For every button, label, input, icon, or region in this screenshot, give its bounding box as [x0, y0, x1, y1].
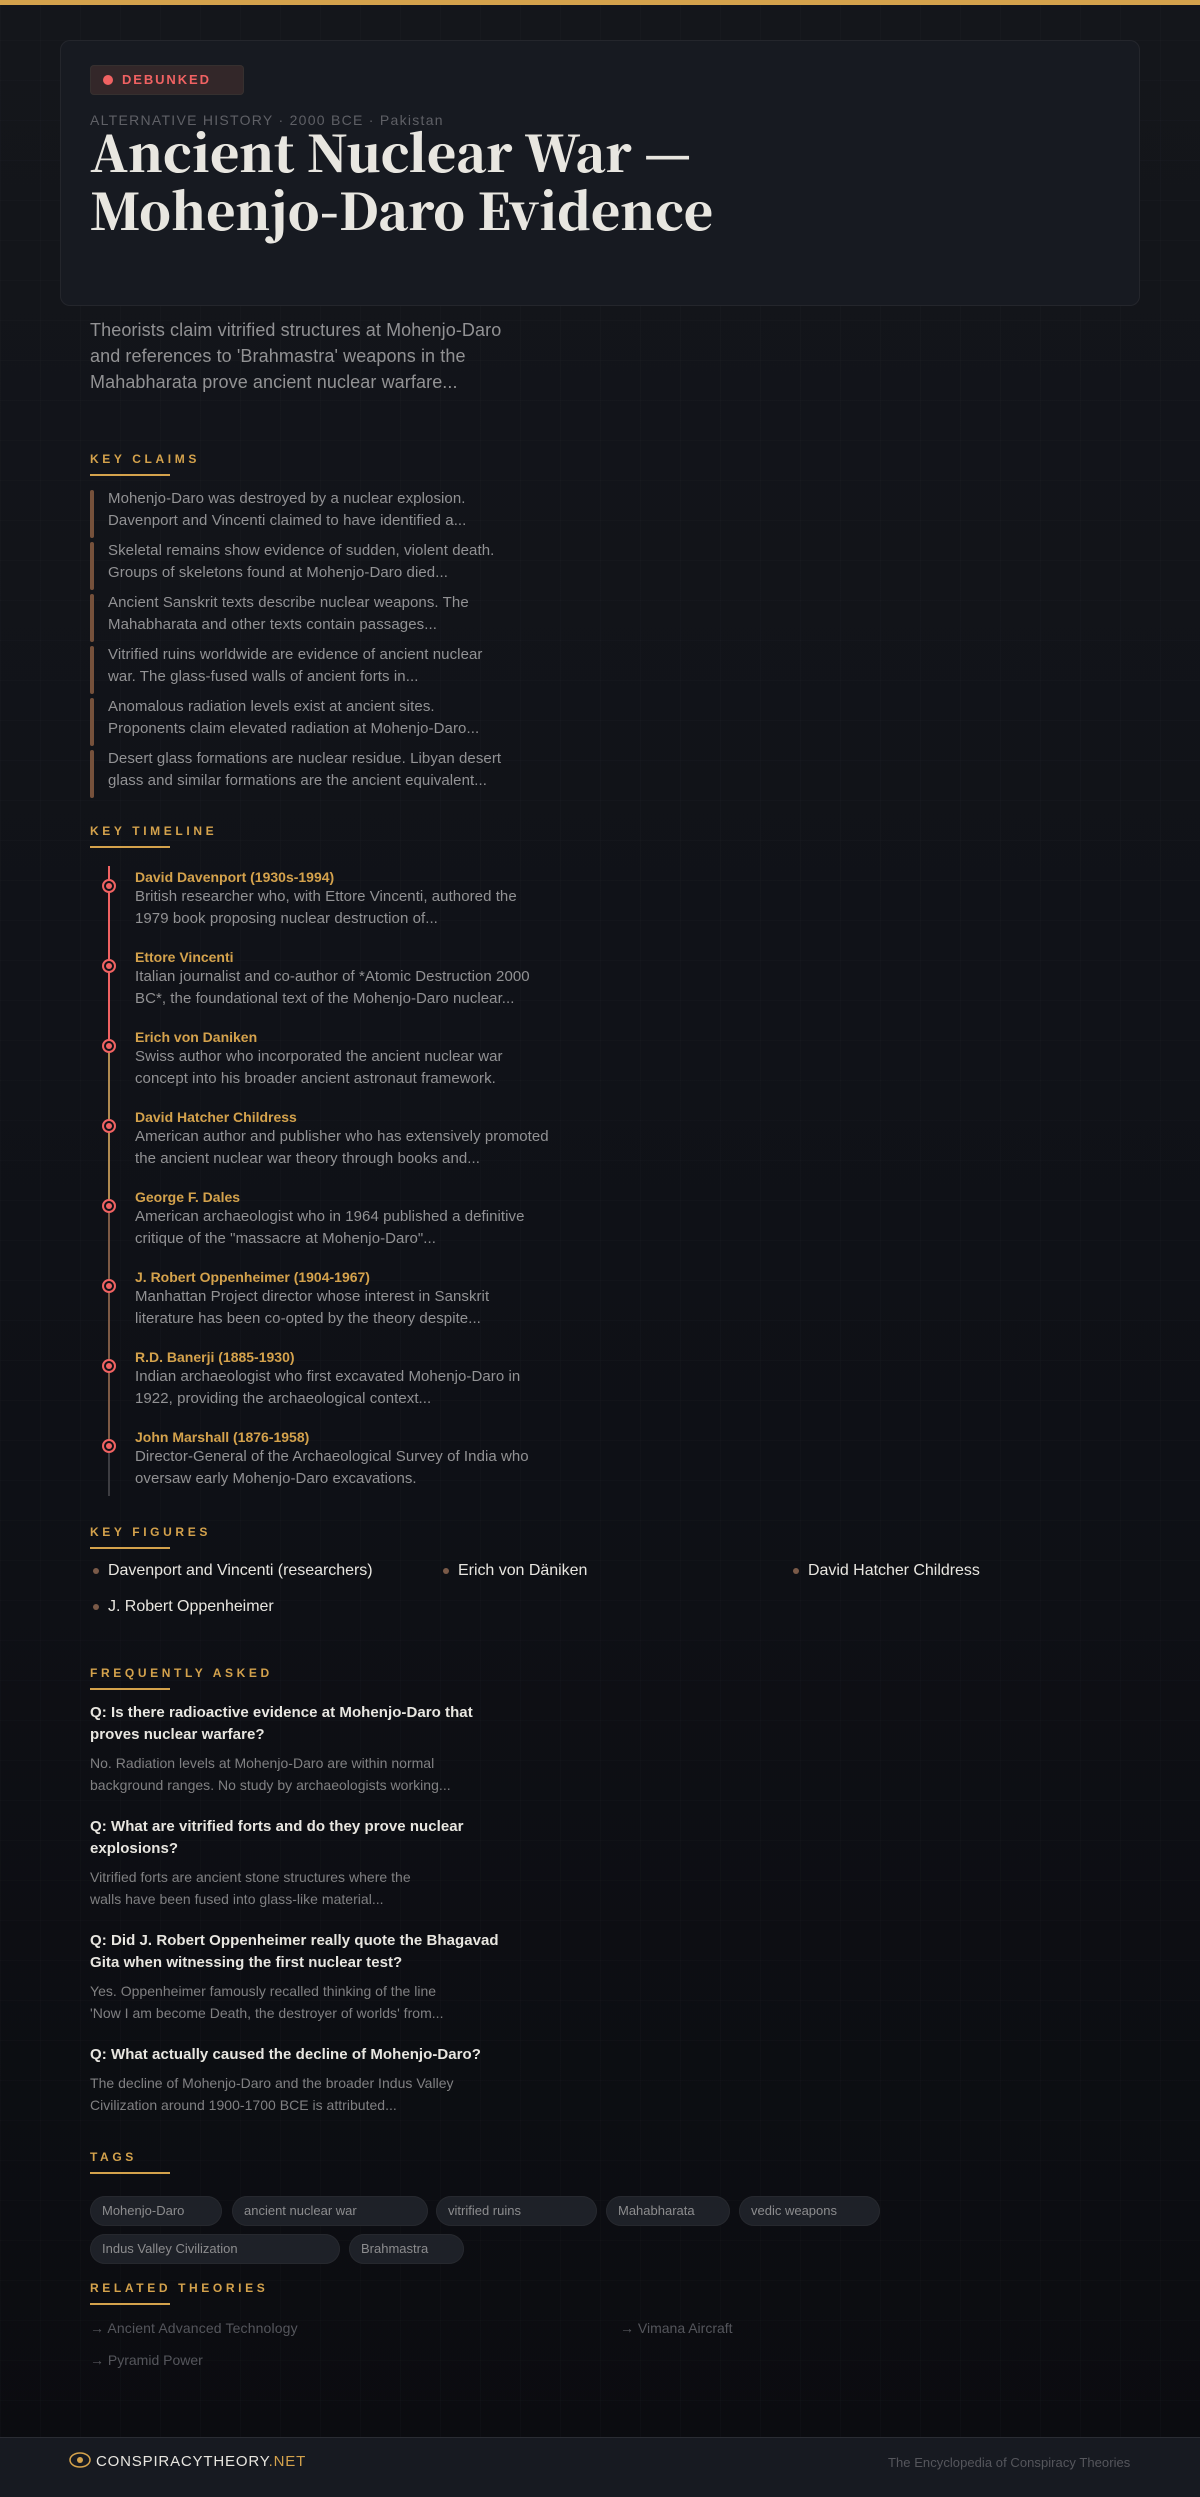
faq 2: Q: What are vitrified forts and do they prove nuclear — [90, 1818, 464, 1835]
timeline entry: J. Robert Oppenheimer: literature has been co-opted by the theory despite... — [135, 1310, 481, 1327]
claim 1: Mohenjo-Daro was destroyed by a nuclear explosion. — [108, 490, 466, 507]
figure: Erich von Däniken: Erich von Däniken — [458, 1562, 587, 1579]
timeline entry: George F. Dales — [102, 1189, 524, 1247]
heading: key figures: KEY FIGURES — [90, 1525, 211, 1539]
claim 5: Proponents claim elevated radiation at Mohenjo-Daro... — [108, 720, 479, 737]
tag: vitrified ruins — [448, 2203, 521, 2218]
tag: Brahmastra — [361, 2241, 428, 2256]
tag: Mohenjo-Daro — [102, 2203, 184, 2218]
timeline entry: Erich von Daniken: Erich von Daniken — [135, 1029, 257, 1045]
claim 2: Groups of skeletons found at Mohenjo-Daro died... — [108, 564, 448, 581]
badge label: DEBUNKED — [122, 72, 211, 87]
intro text: Mahabharata prove ancient nuclear warfare... — [90, 372, 458, 392]
faq 1: Q: Is there radioactive evidence at Mohenjo-Daro that — [90, 1704, 473, 1721]
claim 6: Desert glass formations are nuclear residue. Libyan desert — [108, 750, 501, 767]
faq 1 — [90, 1704, 473, 1793]
timeline entry: George F. Dales: American archaeologist who in 1964 published a definitive — [135, 1208, 524, 1225]
panel: key figures — [90, 1525, 980, 1615]
timeline entry: George F. Dales: George F. Dales — [135, 1189, 240, 1205]
claim 4: war. The glass-fused walls of ancient forts in... — [108, 668, 418, 685]
tag — [606, 2196, 730, 2226]
tag — [90, 2234, 340, 2264]
figure: Davenport and Vincenti: Davenport and Vincenti (researchers) — [108, 1562, 373, 1579]
related link: → Vimana Aircraft — [620, 2320, 733, 2336]
faq 2: explosions? — [90, 1840, 178, 1857]
timeline entry: David Hatcher Childress: the ancient nuclear war theory through books and... — [135, 1150, 480, 1167]
figure: David Hatcher Childress: David Hatcher Childress — [808, 1562, 980, 1579]
category and date line: ALTERNATIVE HISTORY · 2000 BCE · Pakistan — [90, 112, 444, 128]
title: Mohenjo-Daro Evidence — [90, 173, 713, 245]
heading: frequently asked: FREQUENTLY ASKED — [90, 1666, 273, 1680]
timeline entry: David Davenport: David Davenport (1930s-1994) — [135, 869, 334, 885]
claim 1: Davenport and Vincenti claimed to have identified a... — [108, 512, 466, 529]
timeline entry: John Marshall: oversaw early Mohenjo-Daro excavations. — [135, 1470, 417, 1487]
claim 4: Vitrified ruins worldwide are evidence of ancient nuclear — [108, 646, 482, 663]
tag — [436, 2196, 597, 2226]
intro text — [90, 320, 501, 392]
timeline entry: R.D. Banerji: R.D. Banerji (1885-1930) — [135, 1349, 295, 1365]
faq 3: Q: Did J. Robert Oppenheimer really quote the Bhagavad — [90, 1932, 499, 1949]
timeline entry: R.D. Banerji: 1922, providing the archaeological context... — [135, 1390, 431, 1407]
claim 3: Ancient Sanskrit texts describe nuclear weapons. The — [108, 594, 469, 611]
faq 3: Gita when witnessing the first nuclear test? — [90, 1954, 402, 1971]
timeline entry: George F. Dales: critique of the "massacre at Mohenjo-Daro"... — [135, 1230, 436, 1247]
title — [90, 115, 713, 245]
faq 4: Civilization around 1900-1700 BCE is attributed... — [90, 2097, 397, 2113]
timeline entry: David Hatcher Childress: David Hatcher Childress — [135, 1109, 297, 1125]
site name: CONSPIRACYTHEORY.NET — [96, 2453, 306, 2470]
faq 4: The decline of Mohenjo-Daro and the broader Indus Valley — [90, 2075, 454, 2091]
claim 6: glass and similar formations are the ancient equivalent... — [108, 772, 487, 789]
timeline entry: Erich von Daniken: concept into his broader ancient astronaut framework. — [135, 1070, 496, 1087]
faq 4 — [90, 2046, 481, 2113]
claim 3: Mahabharata and other texts contain passages... — [108, 616, 437, 633]
tag: Mahabharata — [618, 2203, 695, 2218]
panel: header — [60, 40, 1140, 306]
heading: tags: TAGS — [90, 2150, 137, 2164]
tag: Indus Valley Civilization — [102, 2241, 238, 2256]
intro text: and references to 'Brahmastra' weapons in the — [90, 346, 466, 366]
figure: J. Robert Oppenheimer: J. Robert Oppenheimer — [108, 1598, 274, 1615]
related link: → Ancient Advanced Technology — [90, 2320, 298, 2336]
timeline entry: John Marshall — [102, 1429, 529, 1487]
faq 1: background ranges. No study by archaeologists working... — [90, 1777, 451, 1793]
related link: → Pyramid Power — [90, 2352, 203, 2368]
faq 2: walls have been fused into glass-like material... — [90, 1891, 384, 1907]
tag: ancient nuclear war — [244, 2203, 357, 2218]
panel: related theories — [90, 2281, 733, 2368]
heading: related theories: RELATED THEORIES — [90, 2281, 268, 2295]
timeline entry: R.D. Banerji: Indian archaeologist who first excavated Mohenjo-Daro in — [135, 1368, 520, 1385]
timeline entry: David Davenport: British researcher who, with Ettore Vincenti, authored the — [135, 888, 517, 905]
timeline entry: David Hatcher Childress: American author and publisher who has extensively promoted — [135, 1128, 549, 1145]
timeline entry: John Marshall: John Marshall (1876-1958) — [135, 1429, 309, 1445]
panel: tags — [90, 2150, 880, 2264]
top accent bar — [0, 0, 1200, 5]
intro text: Theorists claim vitrified structures at Mohenjo-Daro — [90, 320, 501, 340]
timeline entry: Ettore Vincenti: Italian journalist and co-author of *Atomic Destruction 2000 — [135, 968, 530, 985]
panel: key timeline — [90, 824, 549, 1496]
timeline entry: J. Robert Oppenheimer — [102, 1269, 490, 1327]
tag — [739, 2196, 880, 2226]
status badge: debunked — [90, 65, 244, 95]
claim 5 — [90, 698, 479, 746]
title: Ancient Nuclear War — — [90, 115, 691, 187]
timeline entry: John Marshall: Director-General of the Archaeological Survey of India who — [135, 1448, 529, 1465]
timeline entry: J. Robert Oppenheimer: Manhattan Project director whose interest in Sanskrit — [135, 1288, 489, 1305]
claim 5: Anomalous radiation levels exist at ancient sites. — [108, 698, 435, 715]
timeline entry: David Davenport: 1979 book proposing nuclear destruction of... — [135, 910, 438, 927]
timeline entry: Ettore Vincenti — [102, 949, 530, 1007]
heading: key timeline: KEY TIMELINE — [90, 824, 217, 838]
faq 1: proves nuclear warfare? — [90, 1726, 265, 1743]
claim 2 — [90, 542, 494, 590]
faq 3 — [90, 1932, 499, 2021]
panel: frequently asked — [90, 1666, 499, 2113]
claim 2: Skeletal remains show evidence of sudden, violent death. — [108, 542, 494, 559]
timeline entry: David Hatcher Childress — [102, 1109, 549, 1167]
footer — [0, 2437, 1200, 2497]
heading: key claims: KEY CLAIMS — [90, 452, 200, 466]
claim 6 — [90, 750, 501, 798]
claim 3 — [90, 594, 469, 642]
tag — [349, 2234, 464, 2264]
faq 1: No. Radiation levels at Mohenjo-Daro are within normal — [90, 1755, 434, 1771]
timeline entry: J. Robert Oppenheimer: J. Robert Oppenheimer (1904-1967) — [135, 1269, 370, 1285]
faq 2: Vitrified forts are ancient stone structures where the — [90, 1869, 411, 1885]
tag: vedic weapons — [751, 2203, 837, 2218]
timeline entry: David Davenport — [102, 869, 517, 927]
faq 3: Yes. Oppenheimer famously recalled thinking of the line — [90, 1983, 436, 1999]
icon: eye logo — [69, 2452, 91, 2468]
timeline entry: Ettore Vincenti: BC*, the foundational text of the Mohenjo-Daro nuclear... — [135, 990, 514, 1007]
timeline rail — [108, 866, 110, 1496]
faq 2 — [90, 1818, 464, 1907]
claim 4 — [90, 646, 482, 694]
faq 3: 'Now I am become Death, the destroyer of worlds' from... — [90, 2005, 444, 2021]
tag — [90, 2196, 222, 2226]
badge dot — [103, 75, 113, 85]
panel: key claims — [90, 452, 501, 798]
tag — [232, 2196, 428, 2226]
timeline entry: Ettore Vincenti: Ettore Vincenti — [135, 949, 234, 965]
timeline entry: R.D. Banerji — [102, 1349, 520, 1407]
timeline entry: Erich von Daniken — [102, 1029, 503, 1087]
claim 1 — [90, 490, 466, 538]
faq 4: Q: What actually caused the decline of Mohenjo-Daro? — [90, 2046, 481, 2063]
timeline entry: Erich von Daniken: Swiss author who incorporated the ancient nuclear war — [135, 1048, 503, 1065]
tagline: The Encyclopedia of Conspiracy Theories — [888, 2455, 1130, 2470]
